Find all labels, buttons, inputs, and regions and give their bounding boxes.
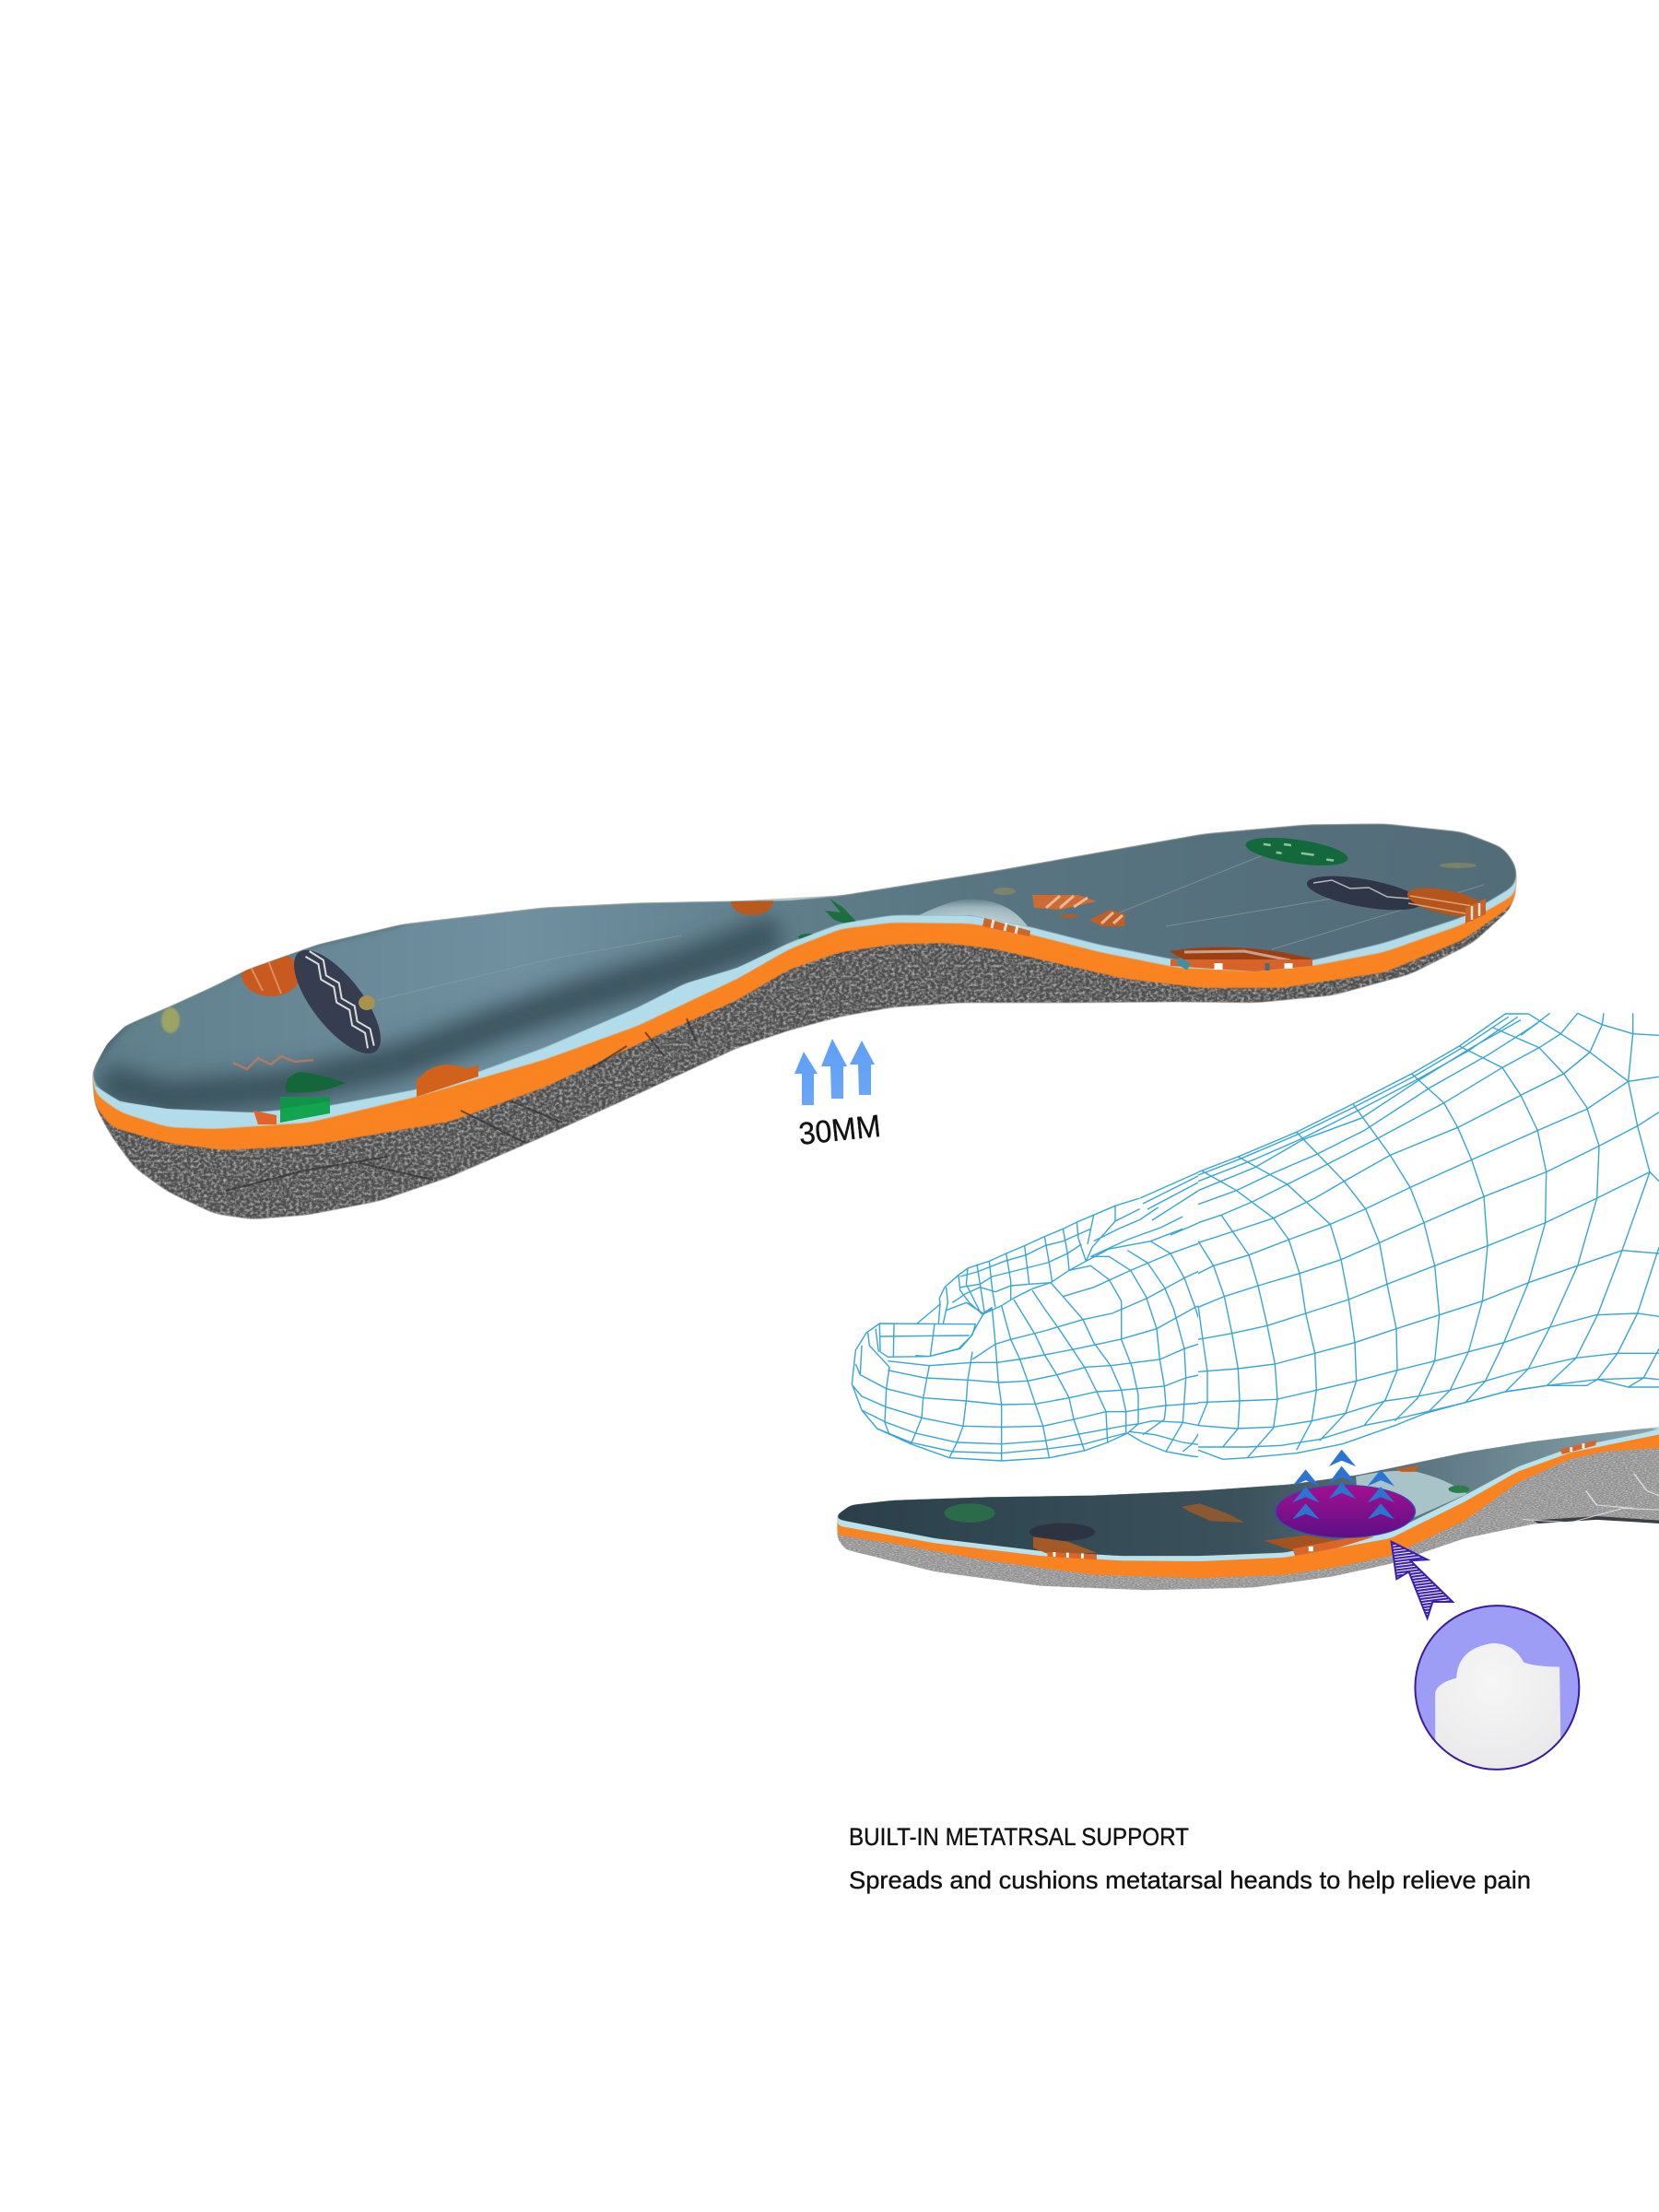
orange foam layer [92, 824, 1516, 1150]
lower orange motif [1395, 1465, 1419, 1472]
arrow 2 [821, 1039, 847, 1099]
infographic canvas [92, 824, 1659, 1894]
metatarsal bump [919, 899, 1028, 926]
dark red motif at heel edge [1170, 947, 1312, 959]
wireframe: instep section [1198, 1013, 1659, 1459]
lower sole layer [838, 1424, 1659, 1590]
heading: built-in metatarsal support: BUILT-IN METATRSAL SUPPORT [849, 1823, 1189, 1851]
sole highlight [1523, 1474, 1659, 1523]
dark wavy oval [294, 949, 381, 1054]
wireframe: toe section [852, 1198, 1226, 1461]
wireframe: knuckle join [1140, 1172, 1198, 1235]
lower pad bump [1356, 1471, 1467, 1521]
description text: Spreads and cushions metatarsal heands to help relieve pain [849, 1866, 1531, 1894]
lower rim stripes [1047, 1552, 1097, 1559]
green star oval [1246, 838, 1347, 865]
top surface [92, 824, 1516, 1112]
lower orange motifs [1033, 1536, 1097, 1554]
green rim block [280, 1097, 330, 1109]
dark wavy motif right [1307, 876, 1419, 911]
hatched purple arrow [1392, 1542, 1453, 1618]
orange dome [420, 1065, 465, 1078]
arrow 1 [794, 1052, 818, 1105]
lower top surface [838, 1424, 1659, 1556]
arrow 3 [850, 1041, 875, 1095]
lower orange layer [838, 1424, 1659, 1578]
green blob [286, 1072, 346, 1093]
yellow mark [161, 1007, 180, 1033]
insole: large top view [92, 824, 1516, 1219]
purple pressure ellipse [1276, 1485, 1415, 1537]
yellow small marks [994, 888, 1016, 895]
lower dark motif [1030, 1524, 1095, 1541]
green fragments [825, 899, 855, 924]
upward chevrons [1292, 1450, 1394, 1519]
orange motif behind oval [241, 956, 299, 996]
sole tread marks [226, 1018, 696, 1191]
sole layer [92, 824, 1516, 1219]
lens outline [1415, 1606, 1579, 1770]
lens disc [1415, 1606, 1579, 1770]
small gold dot [359, 995, 375, 1010]
orange striped motif right [1406, 888, 1480, 916]
surface shading and pattern [92, 832, 1489, 1120]
lower blue rim [838, 1424, 1659, 1561]
white metatarsal pad [1435, 1643, 1561, 1771]
orange striped diamonds [1032, 895, 1097, 910]
insole: lower view with metatarsal pad [838, 1424, 1659, 1771]
label: 30MM: 30MM [797, 1109, 882, 1152]
sole shadow right [1533, 1516, 1659, 1524]
arrows: 30mm arch height [794, 1039, 875, 1105]
wireframe foot [852, 1013, 1659, 1461]
orange motif stripes [251, 962, 282, 994]
lower green dots [945, 1503, 995, 1523]
orange squiggle [233, 1056, 313, 1069]
detail lens [1415, 1606, 1579, 1771]
rim stripe details [253, 899, 1486, 1124]
orange top motif [731, 900, 773, 915]
light blue rim [92, 824, 1516, 1129]
